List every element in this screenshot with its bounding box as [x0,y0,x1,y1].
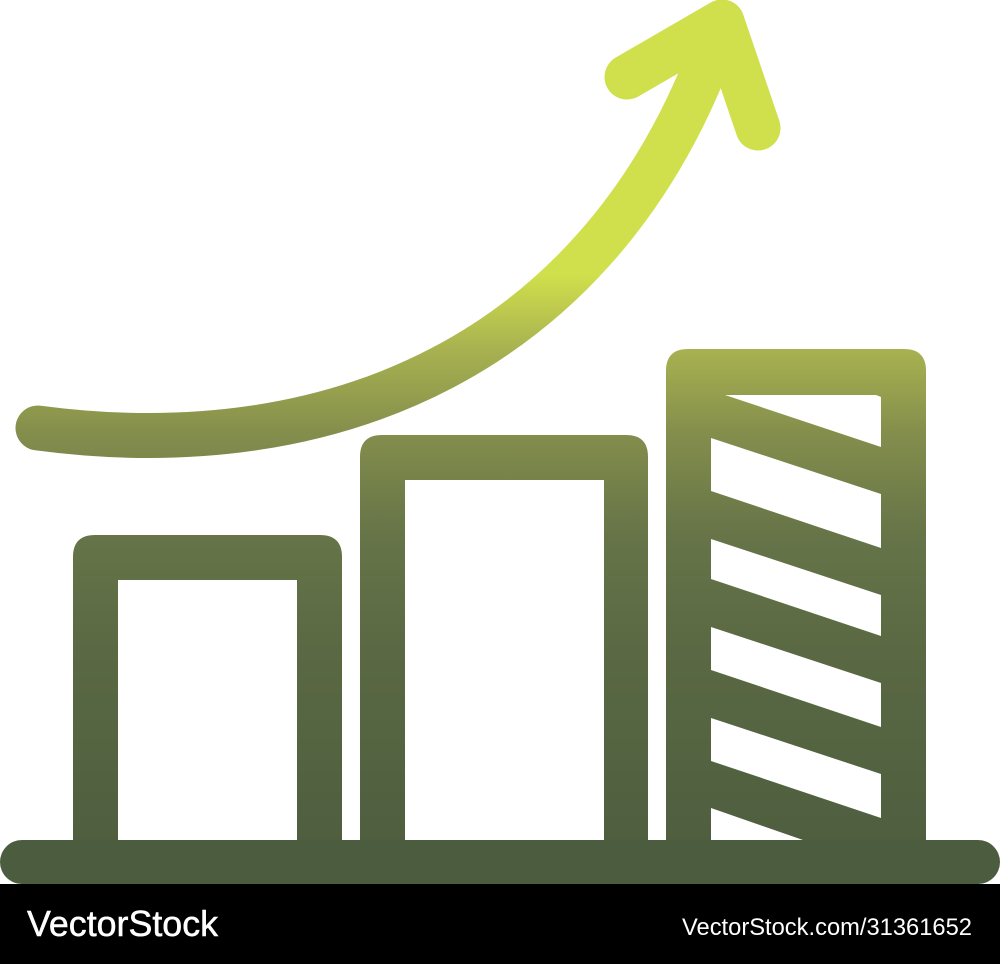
bar: short [73,535,342,850]
brand name: VectorStock [27,903,219,944]
arrow head [627,22,758,128]
arrow: rising curve [38,70,704,436]
baseline [0,840,1000,884]
bar: tall striped [666,349,926,850]
image id: VectorStock.com/31361652 [682,914,972,941]
watermark band [0,884,1000,964]
bar: medium [360,435,648,850]
